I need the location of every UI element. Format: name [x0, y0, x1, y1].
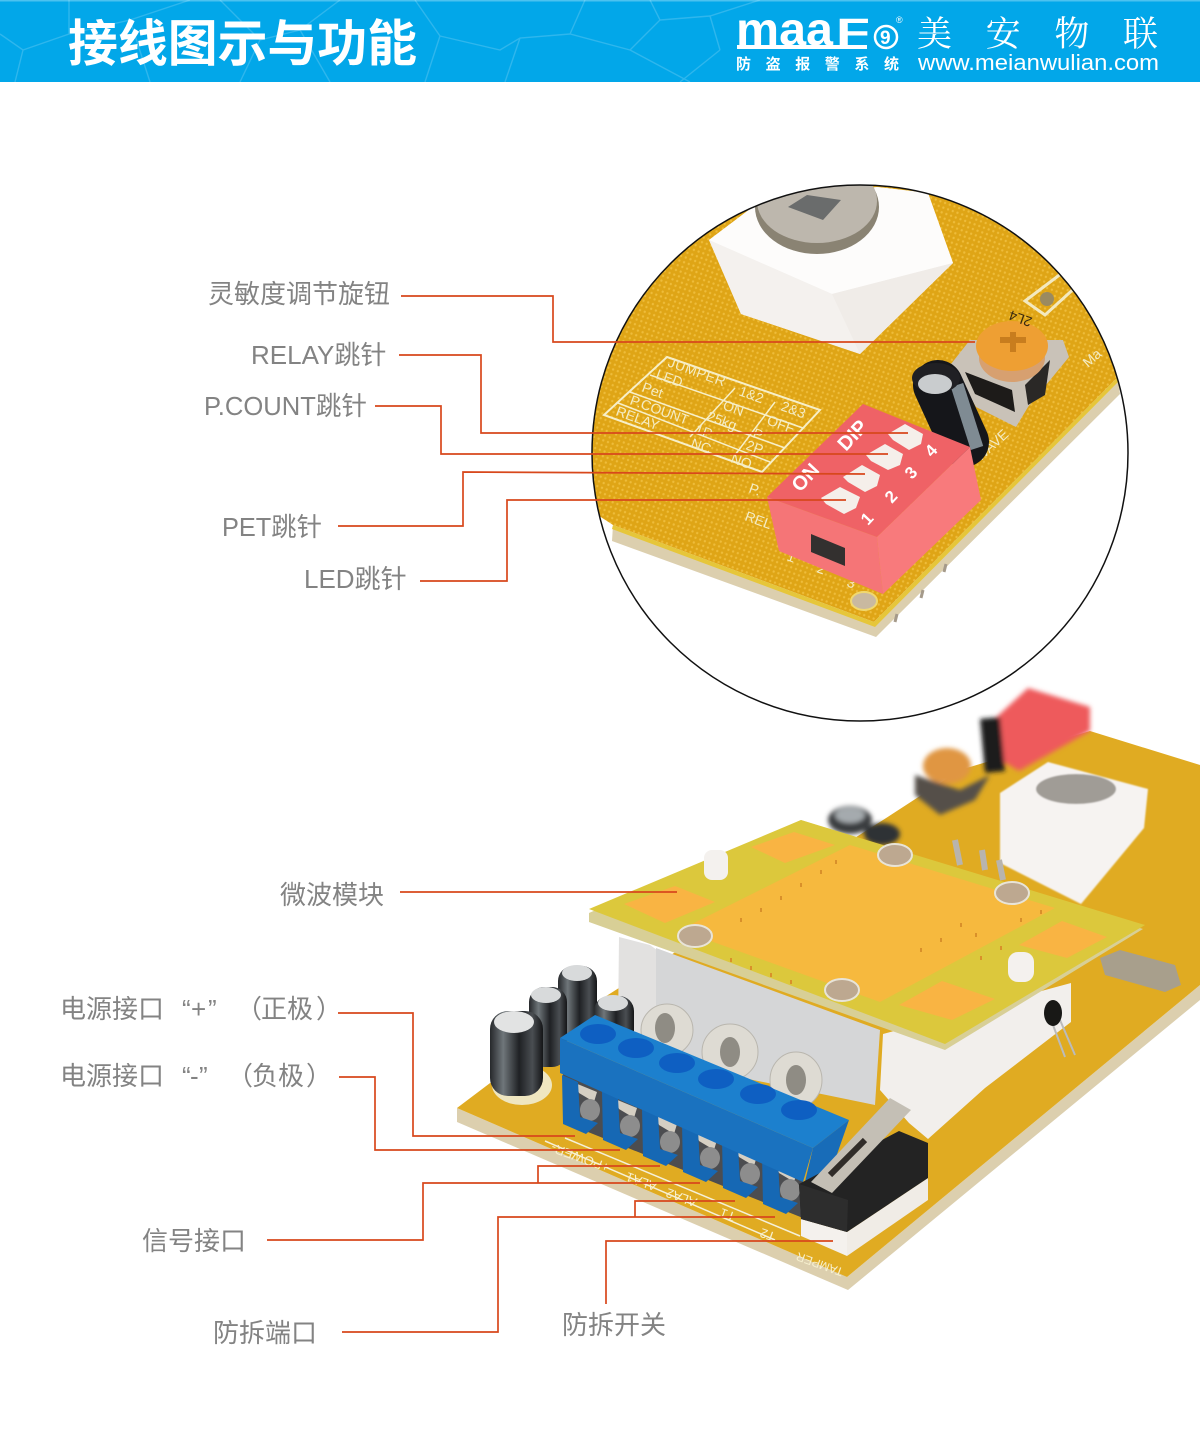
callout: power negative: ”	[199, 1061, 208, 1091]
red DIP switch: 1	[857, 509, 877, 529]
PCB silk table: RELAY	[614, 403, 662, 433]
micro switch	[799, 1098, 928, 1256]
PCB silk table: P	[751, 425, 765, 443]
red DIP switch: 3	[901, 463, 921, 483]
potentiometer: 2L4	[1006, 307, 1034, 330]
PCB silk table: 1&2	[737, 383, 766, 406]
callout: tamper switch	[562, 1241, 833, 1340]
electrolytic capacitor	[912, 363, 977, 448]
PCB silk table: P.COUNT	[628, 392, 691, 428]
silk labels on board: +POWER-	[549, 1140, 611, 1175]
callout: sensitivity knob: 灵敏度调节旋钮	[208, 279, 390, 309]
legs and metal clamps	[562, 1075, 600, 1134]
callout: tamper port: 防拆端口	[213, 1318, 317, 1348]
blue terminal block	[560, 1015, 849, 1218]
pins below the board	[895, 564, 946, 622]
potentiometer	[951, 307, 1069, 427]
callout: power negative: （	[227, 1061, 253, 1091]
red DIP switch: DIP	[834, 416, 872, 455]
PCB silk table: 25kg	[705, 408, 739, 433]
PCB silk table: JUMPER	[666, 354, 728, 389]
callout: sensitivity knob	[208, 279, 975, 342]
PCB silk table: 1	[785, 548, 798, 566]
logo: 防盗报警系统	[736, 55, 899, 73]
callout: tamper port	[213, 1201, 775, 1348]
callout: signal port	[142, 1166, 700, 1256]
callout: LED jumper: LED跳针	[304, 564, 407, 594]
detail circle photo: PIR board close-up	[580, 159, 1140, 721]
PCB silk table	[604, 345, 1105, 592]
logo: F	[836, 12, 870, 54]
PIR block rear	[1000, 762, 1148, 904]
crystal	[1100, 950, 1181, 992]
callout: power negative: “	[182, 1061, 191, 1091]
blurred rear components	[828, 688, 1090, 845]
PCB silk table: 2P	[744, 437, 766, 458]
callout: tamper switch: 防拆开关	[562, 1310, 666, 1340]
callout: power negative	[60, 1061, 620, 1150]
logo	[736, 3, 903, 73]
thermistor	[1044, 1000, 1075, 1057]
red DIP switch: ON	[788, 459, 824, 496]
callout: LED jumper	[304, 500, 846, 594]
callout: RELAY jumper: RELAY跳针	[251, 340, 386, 370]
logo: ®	[896, 15, 903, 25]
PCB silk table: NO	[729, 450, 754, 472]
callout: power positive: （	[236, 994, 262, 1024]
PCB silk table: Pet	[640, 379, 665, 401]
main board photo	[457, 688, 1200, 1290]
red DIP switch	[767, 404, 981, 594]
red DIP switch: 2	[881, 487, 901, 507]
website: www.meianwulian.com	[917, 50, 1159, 75]
callout: microwave module: 微波模块	[280, 880, 384, 910]
callout: power positive: 正极	[261, 994, 313, 1024]
board surface	[457, 731, 1200, 1277]
silk labels on board: T1	[718, 1205, 737, 1224]
title: 接线图示与功能	[68, 16, 417, 72]
PCB silk table: NC	[689, 435, 713, 457]
logo: 9	[880, 28, 891, 49]
callout: power negative: ）	[306, 1061, 332, 1091]
PCB silk table: 2&3	[779, 398, 808, 421]
callout: power negative: -	[190, 1061, 199, 1091]
PCB silk table: OFF	[765, 412, 797, 436]
callout: power positive: +	[191, 994, 206, 1024]
silk labels on board: TAMPER	[794, 1249, 845, 1279]
board surface	[580, 180, 1140, 622]
header banner	[0, 0, 1200, 82]
callout: P.COUNT jumper: P.COUNT跳针	[204, 391, 367, 421]
capacitors	[490, 965, 634, 1096]
board substrate	[457, 985, 1200, 1290]
logo: maa	[736, 3, 833, 55]
callout: PET jumper	[222, 472, 865, 542]
PCB silk table: LED	[654, 366, 685, 390]
callout: power positive: ”	[208, 994, 217, 1024]
callout: power positive: “	[182, 994, 191, 1024]
callout: power negative: 负极	[252, 1061, 304, 1091]
brand name: 美安物联	[917, 15, 1158, 54]
microwave module	[589, 820, 1145, 1050]
solder pad	[1025, 273, 1078, 315]
callout: power positive: ）	[316, 994, 342, 1024]
silk labels on board: ALA2	[664, 1185, 699, 1210]
screws	[678, 925, 712, 947]
silk labels on board: ALA1	[624, 1169, 659, 1194]
PCB silk table: WAVE	[971, 426, 1011, 464]
LEDs	[641, 1004, 822, 1108]
silk labels on board	[545, 1138, 845, 1279]
PCB silk table: REL	[743, 508, 774, 532]
PCB silk table: 1P	[693, 421, 715, 442]
callout: signal port: 信号接口	[142, 1226, 246, 1256]
callout: power negative: 电源接口	[60, 1061, 164, 1091]
callout: RELAY jumper	[251, 340, 908, 433]
silk labels on board: T2	[758, 1225, 777, 1244]
PCB silk table: 3	[845, 574, 858, 592]
terminal cavity	[563, 1070, 803, 1218]
white posts	[704, 850, 728, 880]
PCB silk table: Ma	[1079, 345, 1105, 370]
left and right white housing	[618, 937, 1071, 1139]
red DIP switch: 4	[921, 440, 942, 461]
capacitor pad	[492, 1065, 552, 1105]
callout: PET jumper: PET跳针	[222, 512, 322, 542]
callout: power positive: 电源接口	[60, 994, 164, 1024]
vias	[730, 862, 1042, 982]
PCB silk table: 2	[815, 560, 828, 578]
callout: P.COUNT jumper	[204, 391, 888, 454]
pins	[955, 840, 1003, 880]
PCB silk table: ON	[721, 397, 746, 419]
PIR white block	[709, 186, 953, 354]
callout: power positive	[60, 994, 575, 1136]
PCB silk table: P.	[747, 480, 763, 499]
grey housing	[656, 948, 880, 1105]
mount hole	[851, 592, 877, 610]
